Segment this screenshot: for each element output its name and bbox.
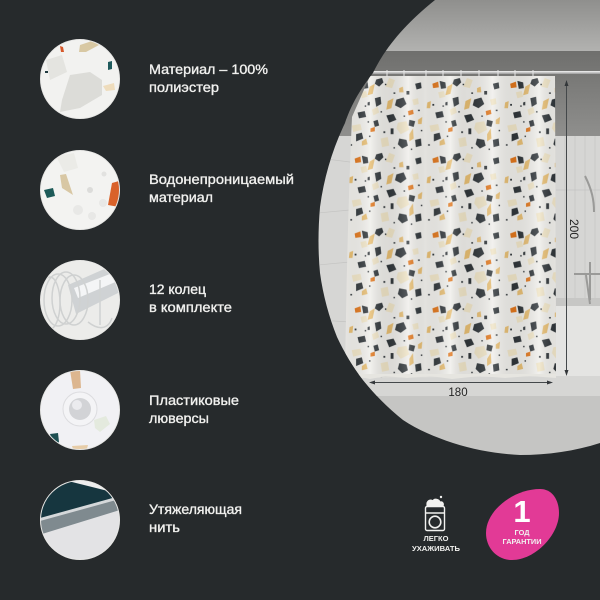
dimension: height 200 xyxy=(564,80,578,376)
feature: rings: в комплекте xyxy=(149,299,232,315)
feature: material xyxy=(40,39,268,119)
icon: washing machine xyxy=(426,496,444,530)
feature: material: полиэстер xyxy=(149,79,219,95)
feature: grommets: люверсы xyxy=(149,410,209,426)
feature: weighted thread: нить xyxy=(149,519,180,535)
rings xyxy=(387,70,533,77)
upper wall xyxy=(318,51,600,136)
photo: bathroom with shower curtain xyxy=(318,0,600,458)
label: Материал – 100% xyxy=(149,61,268,77)
bathtub xyxy=(352,298,600,396)
badge: warranty: ГАРАНТИИ xyxy=(502,537,542,546)
label: Водонепроницаемый xyxy=(149,171,294,187)
label: Пластиковые xyxy=(149,392,239,408)
feature: weighted thread xyxy=(40,480,242,560)
feature: waterproof: материал xyxy=(149,189,213,205)
dimension: width 180: 180 xyxy=(448,387,468,399)
text: УХАЖИВАТЬ xyxy=(412,544,461,553)
thumbnail: fabric xyxy=(40,39,120,119)
feature: rings xyxy=(40,260,232,340)
ceiling xyxy=(386,0,600,51)
feature: grommets xyxy=(40,370,239,452)
dimension: height 200: 200 xyxy=(567,219,581,239)
thumbnail: water drops xyxy=(40,150,120,230)
dimension: width 180 xyxy=(369,380,553,396)
tiled wall xyxy=(318,136,600,396)
badge: warranty xyxy=(486,489,559,560)
badge: warranty: 1 xyxy=(513,494,531,529)
feature: waterproof xyxy=(40,150,294,230)
thumbnail: hem xyxy=(40,480,120,560)
label: Утяжеляющая xyxy=(149,501,242,517)
floor xyxy=(377,396,600,455)
care label: ЛЕГКО xyxy=(424,534,449,543)
thumbnail: rod with rings xyxy=(40,260,120,340)
label: 12 колец xyxy=(149,281,206,297)
badge: warranty: ГОД xyxy=(514,528,530,537)
curtain rod xyxy=(372,71,600,74)
faucet and shower xyxy=(574,176,600,304)
thumbnail: grommet xyxy=(40,370,120,452)
curtain xyxy=(345,76,556,379)
